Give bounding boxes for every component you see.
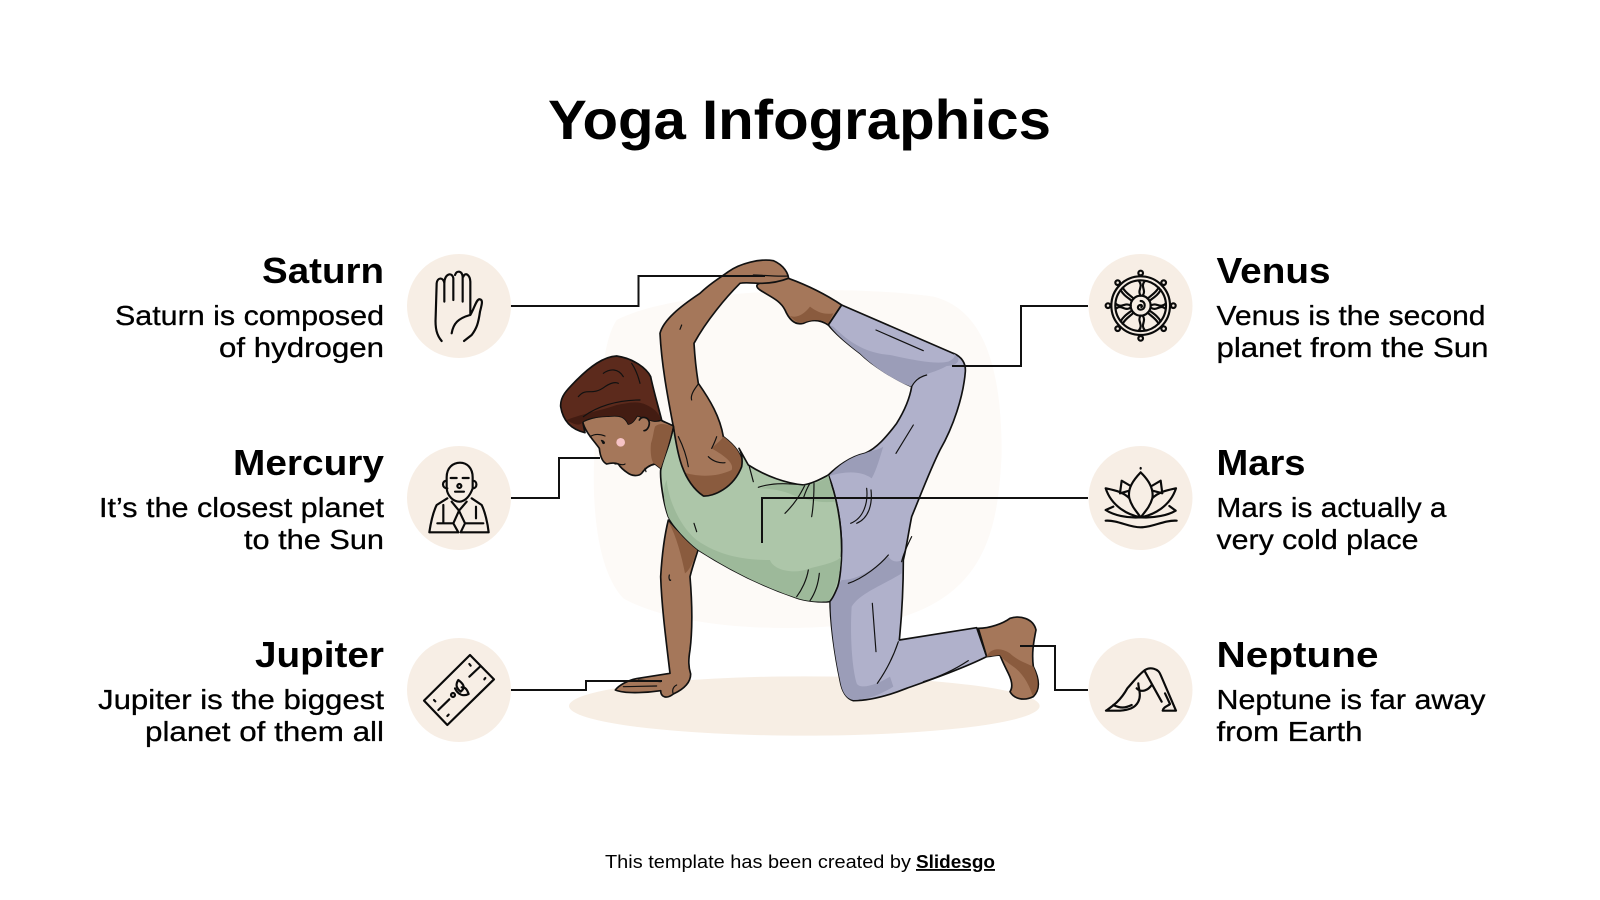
connector: Neptune — [1020, 646, 1088, 690]
description: It’s the closest planet — [99, 492, 384, 523]
background blob — [594, 290, 1002, 628]
heading: Neptune — [1216, 634, 1378, 675]
grounded foot — [978, 617, 1038, 699]
footer credit: This template has been created by — [605, 851, 912, 872]
connector: Mercury — [511, 458, 600, 498]
description: Mars is actually a — [1216, 492, 1447, 523]
description: from Earth — [1216, 716, 1362, 747]
description — [115, 300, 384, 363]
panel: Mars — [1088, 442, 1447, 555]
eye — [601, 440, 605, 444]
description — [98, 684, 384, 747]
pants — [828, 305, 987, 701]
connector: Saturn — [510, 276, 765, 306]
icon: meditating monk — [407, 446, 511, 550]
description — [1216, 492, 1447, 555]
description: Venus is the second — [1216, 300, 1486, 331]
illustration: yoga pose figure — [561, 260, 1040, 736]
description: of hydrogen — [219, 332, 384, 363]
ear — [639, 417, 649, 431]
floor shadow — [569, 676, 1040, 736]
connector: Mars — [762, 498, 1088, 543]
panel: Venus — [1088, 250, 1488, 363]
hair — [561, 356, 662, 433]
connector: Venus — [952, 306, 1088, 366]
panel: Mercury — [99, 442, 511, 555]
description: Saturn is composed — [115, 300, 384, 331]
heading: Venus — [1216, 250, 1330, 291]
icon: downward dog pose — [1088, 638, 1192, 742]
heading: Mercury — [233, 442, 384, 483]
neck and face — [561, 356, 673, 476]
heading: Saturn — [262, 250, 384, 291]
icon: raised hand — [407, 254, 511, 358]
panel: Jupiter — [98, 634, 511, 747]
supporting arm — [615, 520, 698, 697]
description: to the Sun — [244, 524, 384, 555]
icon: dharma wheel — [1088, 254, 1192, 358]
description — [1216, 684, 1486, 747]
footer credit: Slidesgo — [916, 851, 995, 872]
description: planet of them all — [145, 716, 384, 747]
lifted arm — [660, 260, 789, 496]
heading: Jupiter — [255, 634, 384, 675]
description — [1216, 300, 1488, 363]
panel: Neptune — [1088, 634, 1486, 747]
title: Yoga Infographics — [548, 88, 1051, 151]
icon: yoga mat — [407, 638, 511, 742]
tank top — [661, 426, 842, 602]
description: planet from the Sun — [1216, 332, 1488, 363]
icon: lotus flower — [1088, 446, 1192, 550]
heading: Mars — [1216, 442, 1306, 483]
panel: Saturn — [115, 250, 511, 363]
description — [99, 492, 384, 555]
cheek — [616, 438, 625, 447]
description: very cold place — [1216, 524, 1418, 555]
connector: Jupiter — [511, 681, 662, 690]
description: Neptune is far away — [1216, 684, 1486, 715]
raised foot — [757, 278, 842, 325]
description: Jupiter is the biggest — [98, 684, 384, 715]
